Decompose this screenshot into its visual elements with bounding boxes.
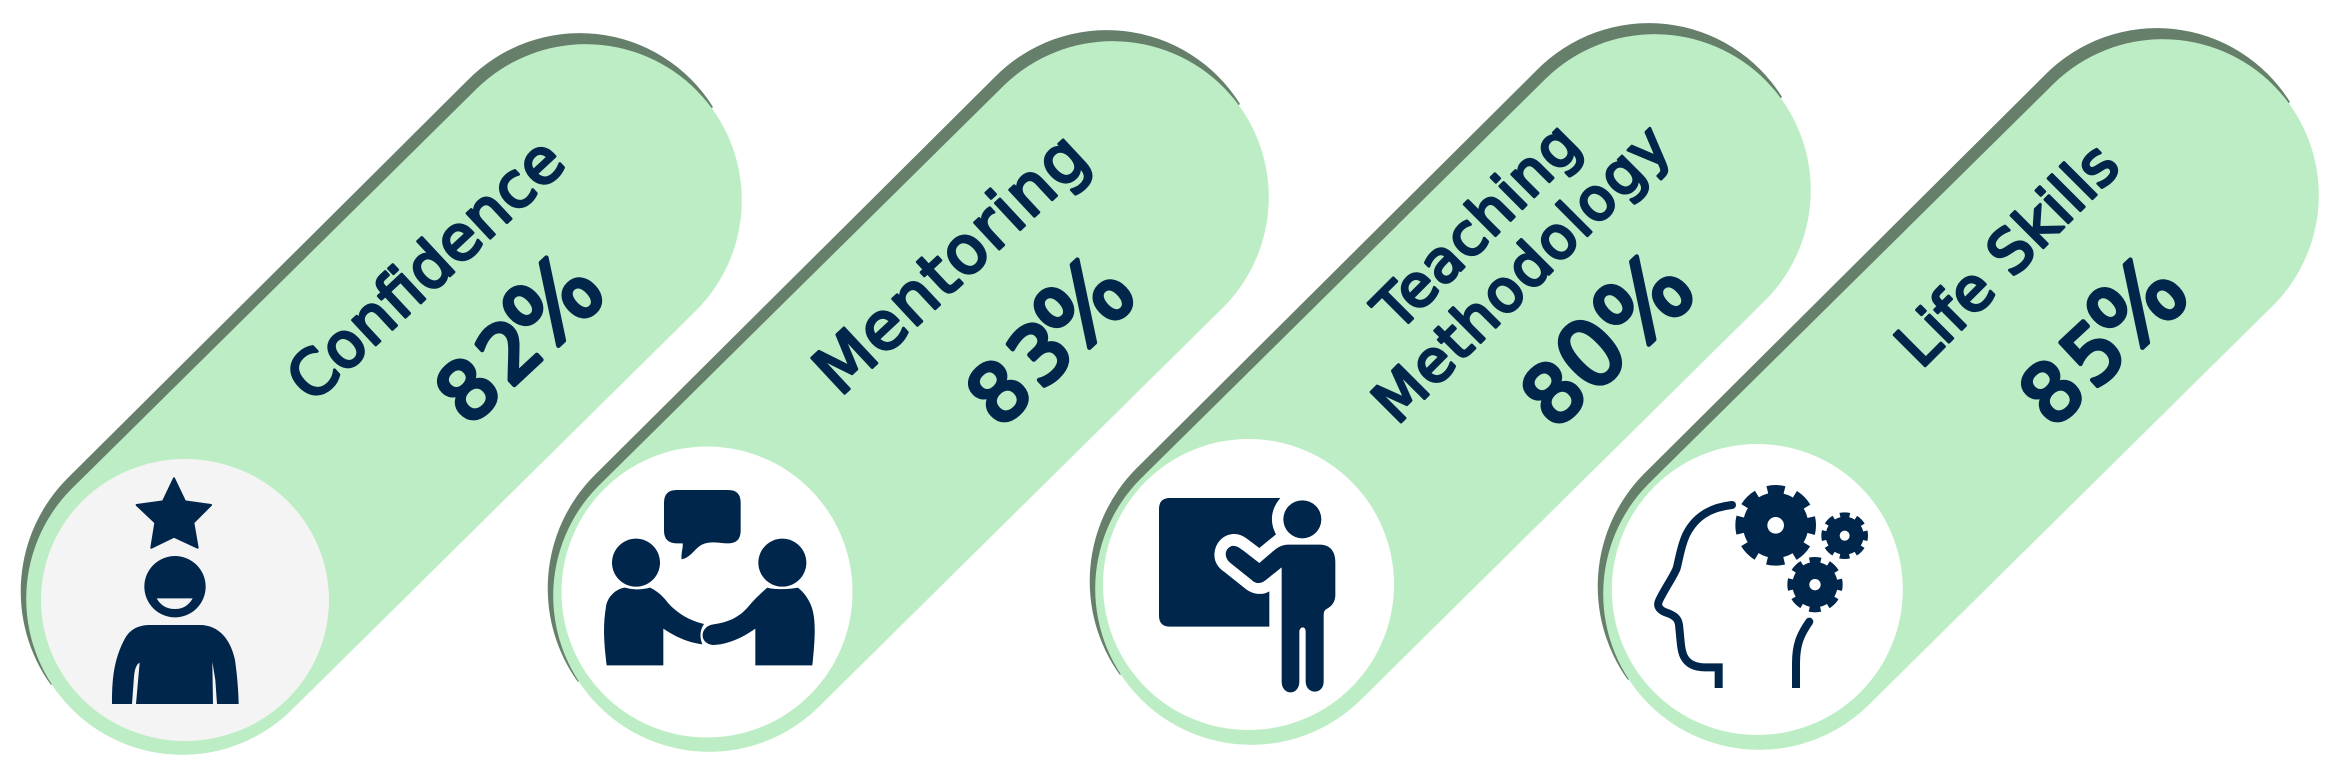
pill: teaching methodology — [1095, 34, 1811, 745]
icon circle: mentoring — [562, 446, 852, 738]
icon: head with gears — [1658, 490, 1865, 688]
icon: two people shaking hands with speech bubble — [604, 490, 815, 665]
pill shadow: mentoring — [548, 30, 1240, 682]
pill: life skills — [1603, 39, 2319, 750]
pill: confidence — [26, 44, 742, 755]
label: Methodology: Methodology — [1359, 111, 1683, 436]
value: 85%: 85% — [1992, 233, 2209, 447]
panel: mentoring — [548, 30, 1269, 752]
value: 80%: 80% — [1493, 230, 1716, 448]
panel: life skills — [1598, 28, 2319, 750]
pill: mentoring — [553, 41, 1269, 752]
pill shadow: confidence — [21, 33, 713, 685]
icon: teacher at board — [1159, 498, 1335, 692]
icon: person with star — [112, 478, 239, 704]
label: Mentoring: Mentoring — [798, 118, 1103, 409]
pill shadow: life skills — [1598, 28, 2290, 680]
icon circle: life skills — [1612, 444, 1903, 735]
value: 83%: 83% — [939, 233, 1156, 447]
label: Teaching: Teaching — [1359, 110, 1593, 344]
panel: confidence — [21, 33, 742, 755]
panel: teaching methodology — [1090, 23, 1811, 745]
value: 82%: 82% — [408, 231, 625, 445]
label: Confidence: Confidence — [272, 123, 578, 415]
icon circle: teaching methodology — [1103, 439, 1394, 730]
pill shadow: teaching methodology — [1090, 23, 1782, 675]
icon circle: confidence — [41, 459, 329, 741]
label: Life Skills: Life Skills — [1882, 130, 2133, 381]
